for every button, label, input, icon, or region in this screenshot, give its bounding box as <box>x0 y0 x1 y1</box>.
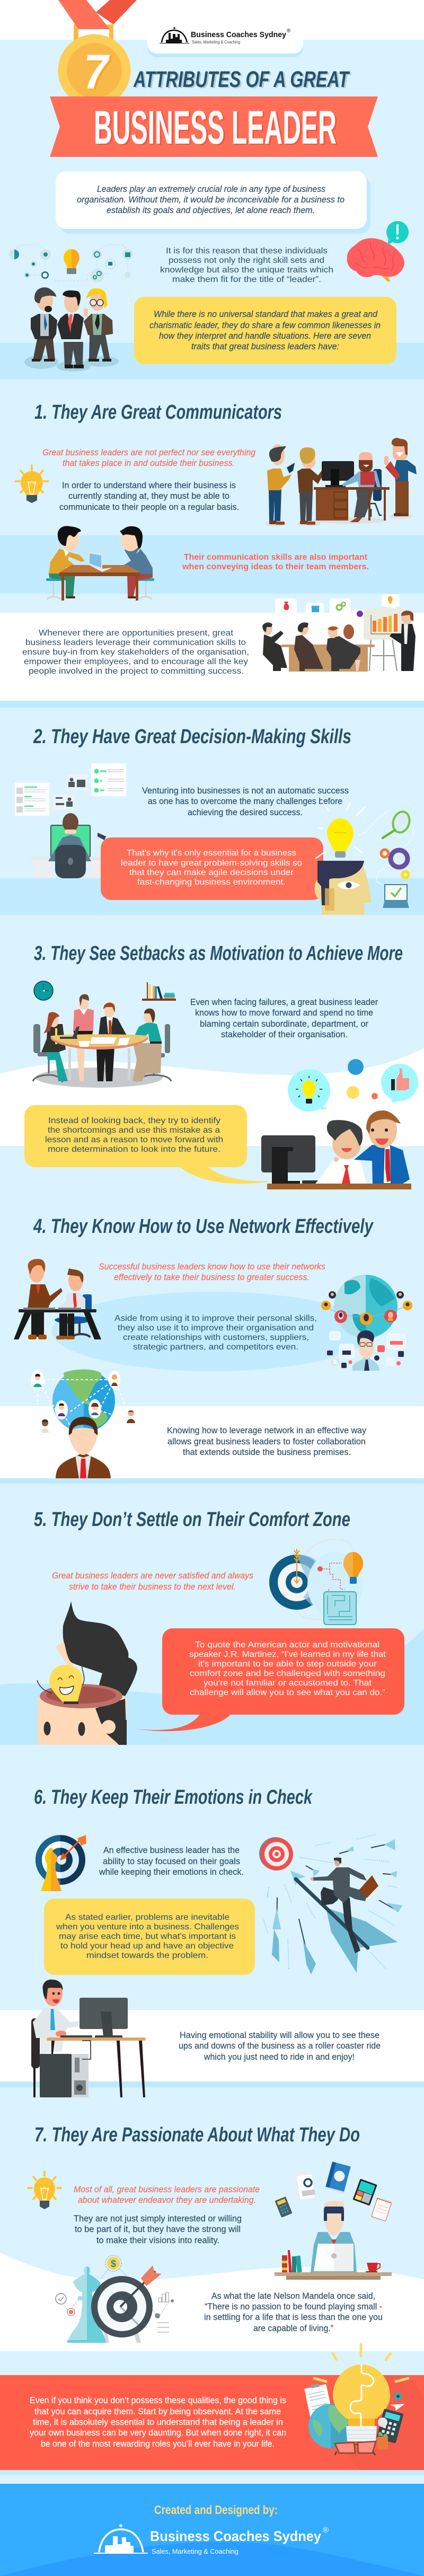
conclusion text: time, it is absolutely essential to understand that being a leader in <box>33 2417 283 2427</box>
man <box>56 1417 111 1478</box>
intro text: establish its goals and objectives, let alone reach them. <box>107 205 315 215</box>
callout: problems are inevitable <box>44 1899 255 1975</box>
panel: conclusion <box>0 2344 424 2475</box>
arrow <box>120 2265 162 2328</box>
icon: bookshelf <box>142 982 176 1001</box>
white band <box>0 613 424 701</box>
heading: section 1: 1. They Are Great Communicators <box>34 401 282 424</box>
body text: empower their employees, and to encourage all the key <box>24 657 248 666</box>
body text: are capable of living.” <box>253 2323 333 2333</box>
callout: quote from J.R. Martinez <box>137 1628 404 1731</box>
mini chart and list <box>155 2292 174 2332</box>
intro paragraph two: knowledge but also the unique traits which <box>160 266 333 275</box>
intro text <box>77 184 344 215</box>
body text: As what the late Nelson Mandela once said, <box>211 2291 375 2301</box>
illustration: target idea and maze <box>269 1539 363 1625</box>
callout: quote from J.R. Martinez: comfort zone and be challenged with something <box>190 1669 385 1678</box>
man <box>33 1980 80 2054</box>
callout: agile decisions: leader to have great problem-solving skills so <box>121 859 302 868</box>
illustration: team around a desk <box>265 438 417 526</box>
icon: company dome logo <box>160 27 189 43</box>
icon: company dome logo <box>94 2524 148 2554</box>
icon: light bulb <box>28 2172 61 2209</box>
intro paragraph two <box>160 246 333 284</box>
blue band <box>0 878 424 915</box>
chat icons <box>327 1331 405 1368</box>
body text: ups and downs of the business as a roller coaster ride <box>179 2041 381 2051</box>
intro paragraph two: possess not only the right skill sets and <box>169 256 324 265</box>
callout: learning from mistakes <box>24 1105 272 1184</box>
callout: learning from mistakes: lesson and as a reason to move forward with <box>45 1135 223 1144</box>
table <box>59 565 140 601</box>
callout: learning from mistakes: Instead of looking back, they try to identify <box>48 1116 220 1125</box>
body text: people involved in the project to committing success. <box>29 667 244 676</box>
panel: section 4 <box>0 1259 424 1484</box>
body text: Whenever there are opportunities present, great <box>39 629 234 638</box>
panel: section 3 <box>0 981 424 1189</box>
desk <box>47 2037 146 2097</box>
illustration: person at computer <box>31 813 110 878</box>
body text: that extends outside the business premises. <box>183 1447 351 1457</box>
body text: communicate to their people on a regular basis. <box>59 502 239 512</box>
glasses <box>335 2441 376 2455</box>
arrow <box>60 1835 86 1860</box>
icon: blue book <box>325 2162 351 2193</box>
clipboard <box>304 2382 333 2420</box>
blue band <box>0 535 424 594</box>
callout: learning from mistakes: the shortcomings and use this mistake as a <box>48 1126 220 1135</box>
body text: Venturing into businesses is not an automatic success <box>142 786 349 796</box>
callout: quote from J.R. Martinez: you're not familiar or accustomed to. That <box>204 1679 372 1688</box>
body text <box>114 1314 317 1352</box>
body text: allows great business leaders to foster collaboration <box>167 1436 366 1446</box>
illustration: two happy colleagues at a computer <box>261 1110 411 1189</box>
icon: calculator <box>275 2196 293 2218</box>
man in teal <box>132 1009 162 1081</box>
body text: Knowing how to leverage network in an effective way <box>167 1425 366 1435</box>
illustration: team meeting at table <box>33 994 171 1088</box>
chess piece <box>67 2266 107 2343</box>
illustration: head with idea and tools <box>315 800 413 915</box>
running businessman <box>311 1857 378 1953</box>
white band <box>0 2010 424 2081</box>
rays <box>314 2344 408 2381</box>
title line one: ATTRIBUTES OF A GREAT <box>133 67 350 92</box>
computer tower <box>40 2041 91 2097</box>
intro text: Leaders play an extremely crucial role in any type of business <box>97 184 325 194</box>
callout: problems are inevitable: As stated earlier, problems are inevitable <box>65 1913 229 1922</box>
big arrow <box>290 1871 398 1973</box>
woman standing <box>73 994 94 1081</box>
man with goatee <box>31 287 57 361</box>
statement in red <box>52 1571 253 1592</box>
body text <box>59 480 239 512</box>
panel: section 1 <box>0 438 424 708</box>
icon: idea network <box>9 245 133 283</box>
conference table <box>281 645 375 672</box>
body text: which you just need to ride in and enjoy! <box>204 2052 355 2062</box>
panel: section 5 <box>0 1539 424 1745</box>
statement in red <box>99 1261 325 1282</box>
body text: create relationships with customers, suppliers, <box>123 1333 309 1342</box>
intro text: organisation. Without them, it would be inconceivable for a business to <box>77 195 344 205</box>
monitor <box>261 1135 342 1184</box>
hair <box>63 1601 137 1696</box>
icon: idea bulb <box>315 800 365 859</box>
body text: business leaders leverage their communication skills to <box>25 638 246 647</box>
body text <box>167 1425 366 1457</box>
round table <box>50 1026 148 1080</box>
icon: tablet <box>353 2178 377 2206</box>
chairs <box>33 1024 171 1082</box>
body text: Having emotional stability will allow you to see these <box>180 2030 379 2040</box>
statement in red: Great business leaders are never satisfied and always <box>52 1571 253 1581</box>
statement in red: strive to take their business to the next level. <box>69 1582 236 1592</box>
desk <box>14 1308 101 1339</box>
callout: problems are inevitable: mindset towards the problem. <box>86 1951 208 1960</box>
long shadow <box>313 2375 424 2470</box>
man with red tie <box>57 290 84 368</box>
callout: quote from J.R. Martinez: challenge will allow you to see what you can do.” <box>190 1688 385 1697</box>
callout: traits intro: traits that great business leaders have: <box>191 341 339 351</box>
body text: ability to stay focused on their goals <box>103 1856 240 1866</box>
man with red book <box>384 438 417 516</box>
callout: traits intro: While there is no universal standard that makes a great and <box>154 309 378 319</box>
icon: coin: $ <box>111 2259 116 2269</box>
callout: learning from mistakes: more determination to look into the future. <box>48 1145 220 1154</box>
body text: currently standing at, they must be able to <box>68 491 229 501</box>
body text: blaming certain subordinate, department, or <box>200 1019 368 1029</box>
stools <box>46 578 154 599</box>
statement in red: Successful business leaders know how to use their networks <box>99 1261 325 1272</box>
icon: magnifier <box>383 809 412 838</box>
idea bulb <box>343 1552 363 1584</box>
logo tagline: Sales, Marketing & Coaching <box>192 40 240 45</box>
icon: laptop with check <box>383 885 409 908</box>
body text: strategic partners, and competitors even. <box>133 1343 298 1352</box>
callout: problems are inevitable: may arise each time, but what's important is <box>59 1932 236 1941</box>
skin <box>38 1641 127 1745</box>
wavy white background <box>0 2253 424 2351</box>
icon: documents <box>292 2171 315 2200</box>
body text: in settling for a life that is less than the one you <box>204 2312 383 2322</box>
body text <box>142 786 349 817</box>
statement in red <box>74 2184 260 2205</box>
body text: “There is no passion to be found playing small - <box>205 2301 382 2312</box>
statement in red: about whatever endeavor they are undertaking. <box>78 2195 256 2205</box>
panel: header <box>0 0 424 157</box>
target <box>259 1837 293 1871</box>
illustration: two businessmen at desk <box>14 1259 101 1339</box>
statement in red <box>182 553 369 571</box>
title line one: ATTRIBUTES OF A GREAT <box>135 68 352 93</box>
illustration: boardroom presentation <box>262 594 416 672</box>
callout: agile decisions: fast-changing business environment. <box>137 878 286 887</box>
callout: quote from J.R. Martinez: it's important to be able to step outside your <box>198 1660 377 1669</box>
colleague in blue suit <box>354 1110 410 1184</box>
idea bubbles <box>275 594 400 620</box>
illustration: man at laptop with floating tools <box>275 2162 392 2280</box>
logo name: Business Coaches Sydney <box>150 2528 321 2544</box>
illustration: woman with global network <box>321 1275 412 1371</box>
maze <box>324 1592 356 1625</box>
standing man <box>28 1259 63 1339</box>
illustration: man with world network <box>31 1370 135 1478</box>
body text: they also use it to improve their organisation and <box>118 1324 314 1333</box>
body text <box>204 2291 383 2333</box>
body text: achieving the desired success. <box>188 807 303 817</box>
dashed arrows <box>263 1834 398 1969</box>
icon: notepad <box>372 2199 392 2221</box>
body text: to make their visions into reality. <box>96 2235 219 2245</box>
statement in red <box>42 447 255 468</box>
body text: In order to understand where their business is <box>62 480 236 490</box>
monitor <box>60 1998 128 2038</box>
statement in red: when conveying ideas to their team members. <box>182 562 369 571</box>
logo tab <box>147 21 303 57</box>
conclusion text: be one of the most rewarding roles you’ll ever have in your life. <box>41 2439 275 2449</box>
bearded man seated <box>342 452 382 522</box>
team member with phone <box>267 444 295 525</box>
coffee cup <box>366 2263 380 2273</box>
statement in red: Their communication skills are also important <box>184 553 368 562</box>
network links <box>38 1380 126 1428</box>
process arrows <box>358 811 413 884</box>
body text <box>74 2213 242 2245</box>
icon: target with chess king <box>36 1835 86 1891</box>
desk <box>267 1184 411 1189</box>
man in blue sweater <box>118 526 153 598</box>
laptop <box>88 551 112 572</box>
callout: traits intro: how they interpret and handle situations. Here are seven <box>159 331 371 341</box>
calculator <box>376 2409 404 2443</box>
intro paragraph two: It is for this reason that these individuals <box>166 246 328 255</box>
thumbs up bubble <box>381 1064 418 1103</box>
body text: An effective business leader has the <box>103 1845 240 1855</box>
medal with number seven: 7 <box>86 46 112 100</box>
callout: traits intro <box>134 297 396 364</box>
illustration: man working at desktop computer <box>31 1980 146 2097</box>
icon: gears <box>381 850 409 878</box>
man with glasses <box>84 288 113 361</box>
body text: as one has to overcome the many challenges before <box>148 796 342 806</box>
icon: wall clock <box>34 981 53 1000</box>
panel: section 2 <box>0 763 424 915</box>
callout: agile decisions <box>101 837 323 900</box>
icon: light bulb <box>15 465 48 503</box>
statement in red: that takes place in and outside their business. <box>63 458 235 468</box>
network avatars <box>321 1291 412 1325</box>
credit heading: Created and Designed by: <box>154 2503 278 2517</box>
icon: brain with alert bubble <box>347 221 409 281</box>
body text: while keeping their emotions in check. <box>99 1867 244 1877</box>
callout: quote from J.R. Martinez: speaker J.R. Martinez, “I've learned in my life that <box>189 1650 386 1659</box>
colleague in white shirt <box>315 1120 366 1184</box>
registered mark: ® <box>287 28 291 34</box>
man in yellow sweater <box>49 526 85 598</box>
illustration: head with idea bulb <box>37 1601 137 1745</box>
books <box>282 2250 302 2272</box>
statement in red: effectively to take their business to greater success. <box>114 1272 310 1282</box>
panel: credits footer <box>0 2484 424 2576</box>
man <box>311 2201 357 2272</box>
floating idea bubbles <box>288 1059 418 1111</box>
band behind leaders <box>0 343 424 380</box>
happy bulb <box>37 1664 84 1704</box>
illustration: businessman racing toward target <box>259 1834 403 1974</box>
chair <box>31 2018 40 2097</box>
seated man <box>55 1268 92 1339</box>
body text: knows how to move forward and spend no time <box>195 1008 373 1018</box>
body text: Even when facing failures, a great business leader <box>190 997 378 1007</box>
medal with number seven <box>58 0 137 107</box>
body text: stakeholder of their organisation. <box>221 1029 348 1039</box>
eyes and ear <box>43 1720 127 1745</box>
blond team member <box>297 447 325 525</box>
conclusion text: that you can acquire them. Start by being observant. At the same <box>34 2406 281 2416</box>
bulb <box>333 2365 390 2441</box>
medal with number seven: 7 <box>84 45 110 99</box>
profile documents <box>15 763 126 816</box>
man in suit <box>96 1003 127 1081</box>
audience <box>262 622 360 671</box>
idea bubble <box>288 1069 330 1111</box>
conclusion text: your own business can be very daunting. But when done right, it can <box>30 2428 286 2438</box>
target <box>91 2276 153 2343</box>
icon: coin <box>105 2255 121 2271</box>
network avatars <box>31 1370 135 1433</box>
body text <box>179 2030 381 2062</box>
illustration: puzzle bulb and tools <box>304 2344 408 2455</box>
panel: section 7 <box>0 2162 424 2351</box>
connectors <box>64 2269 170 2316</box>
callout: agile decisions: That's why it's only essential for a business <box>127 849 296 858</box>
logo name: Business Coaches Sydney <box>191 30 287 39</box>
statement in red: Most of all, great business leaders are passionate <box>74 2184 260 2194</box>
icon: check <box>56 2293 75 2316</box>
illustration: chess piece and target <box>56 2255 174 2343</box>
earth <box>52 1370 115 1432</box>
head <box>315 861 371 915</box>
wavy background <box>0 1628 424 1745</box>
illustration: two people at a table <box>46 526 154 601</box>
panel: introduction <box>56 171 370 234</box>
conclusion text <box>30 2395 286 2449</box>
illustration: three business leaders <box>24 287 119 372</box>
callout: quote from J.R. Martinez: To quote the American actor and motivational <box>195 1640 379 1649</box>
panel: section 6 <box>0 1834 424 2097</box>
body text: to be part of it, but they have the strong will <box>75 2224 241 2234</box>
body text <box>190 997 378 1039</box>
callout: traits intro: charismatic leader, they do share a few common likenesses in <box>149 320 381 330</box>
body text <box>99 1845 244 1877</box>
globe <box>334 1275 398 1338</box>
white band <box>0 1406 424 1478</box>
logo tagline: Sales, Marketing & Coaching <box>152 2547 238 2555</box>
oval background <box>52 1292 372 1371</box>
body text <box>22 629 249 676</box>
title banner <box>50 96 378 157</box>
callout: problems are inevitable: when you venture into a business. Challenges <box>56 1922 239 1931</box>
small arrows <box>272 1839 403 1974</box>
intro paragraph two: make them fit for the title of “leader”. <box>172 275 321 284</box>
woman with glasses <box>352 1330 379 1371</box>
coin and plant <box>377 2418 388 2449</box>
conclusion text: Even if you think you don’t possess these qualities, the good thing is <box>30 2395 286 2405</box>
globe <box>308 2404 353 2448</box>
body text: Aside from using it to improve their personal skills, <box>114 1314 317 1323</box>
woman left <box>41 1012 68 1081</box>
monitor <box>322 461 354 487</box>
target <box>269 1555 326 1610</box>
callout: agile decisions: that they can make agile decisions under <box>129 868 294 877</box>
arrow <box>294 1549 299 1583</box>
chess king <box>41 1848 61 1891</box>
desk <box>316 490 348 521</box>
registered mark: ® <box>323 2526 329 2535</box>
dashed path <box>321 1563 344 1611</box>
opening in head <box>40 1684 122 1708</box>
icons <box>390 2393 405 2411</box>
heading: section 6: 6. They Keep Their Emotions in Check <box>34 1786 313 1809</box>
presenter <box>390 611 416 671</box>
body text: They are not just simply interested or willing <box>74 2213 242 2224</box>
statement in red: Great business leaders are not perfect nor see everything <box>42 447 255 457</box>
wavy white background <box>0 1048 424 1146</box>
board with bar chart <box>364 608 404 671</box>
callout: problems are inevitable: to hold your head up and have an objective <box>60 1942 234 1951</box>
body text: ensure buy-in from key stakeholders of the organisation, <box>22 648 249 657</box>
desk <box>275 2272 392 2280</box>
